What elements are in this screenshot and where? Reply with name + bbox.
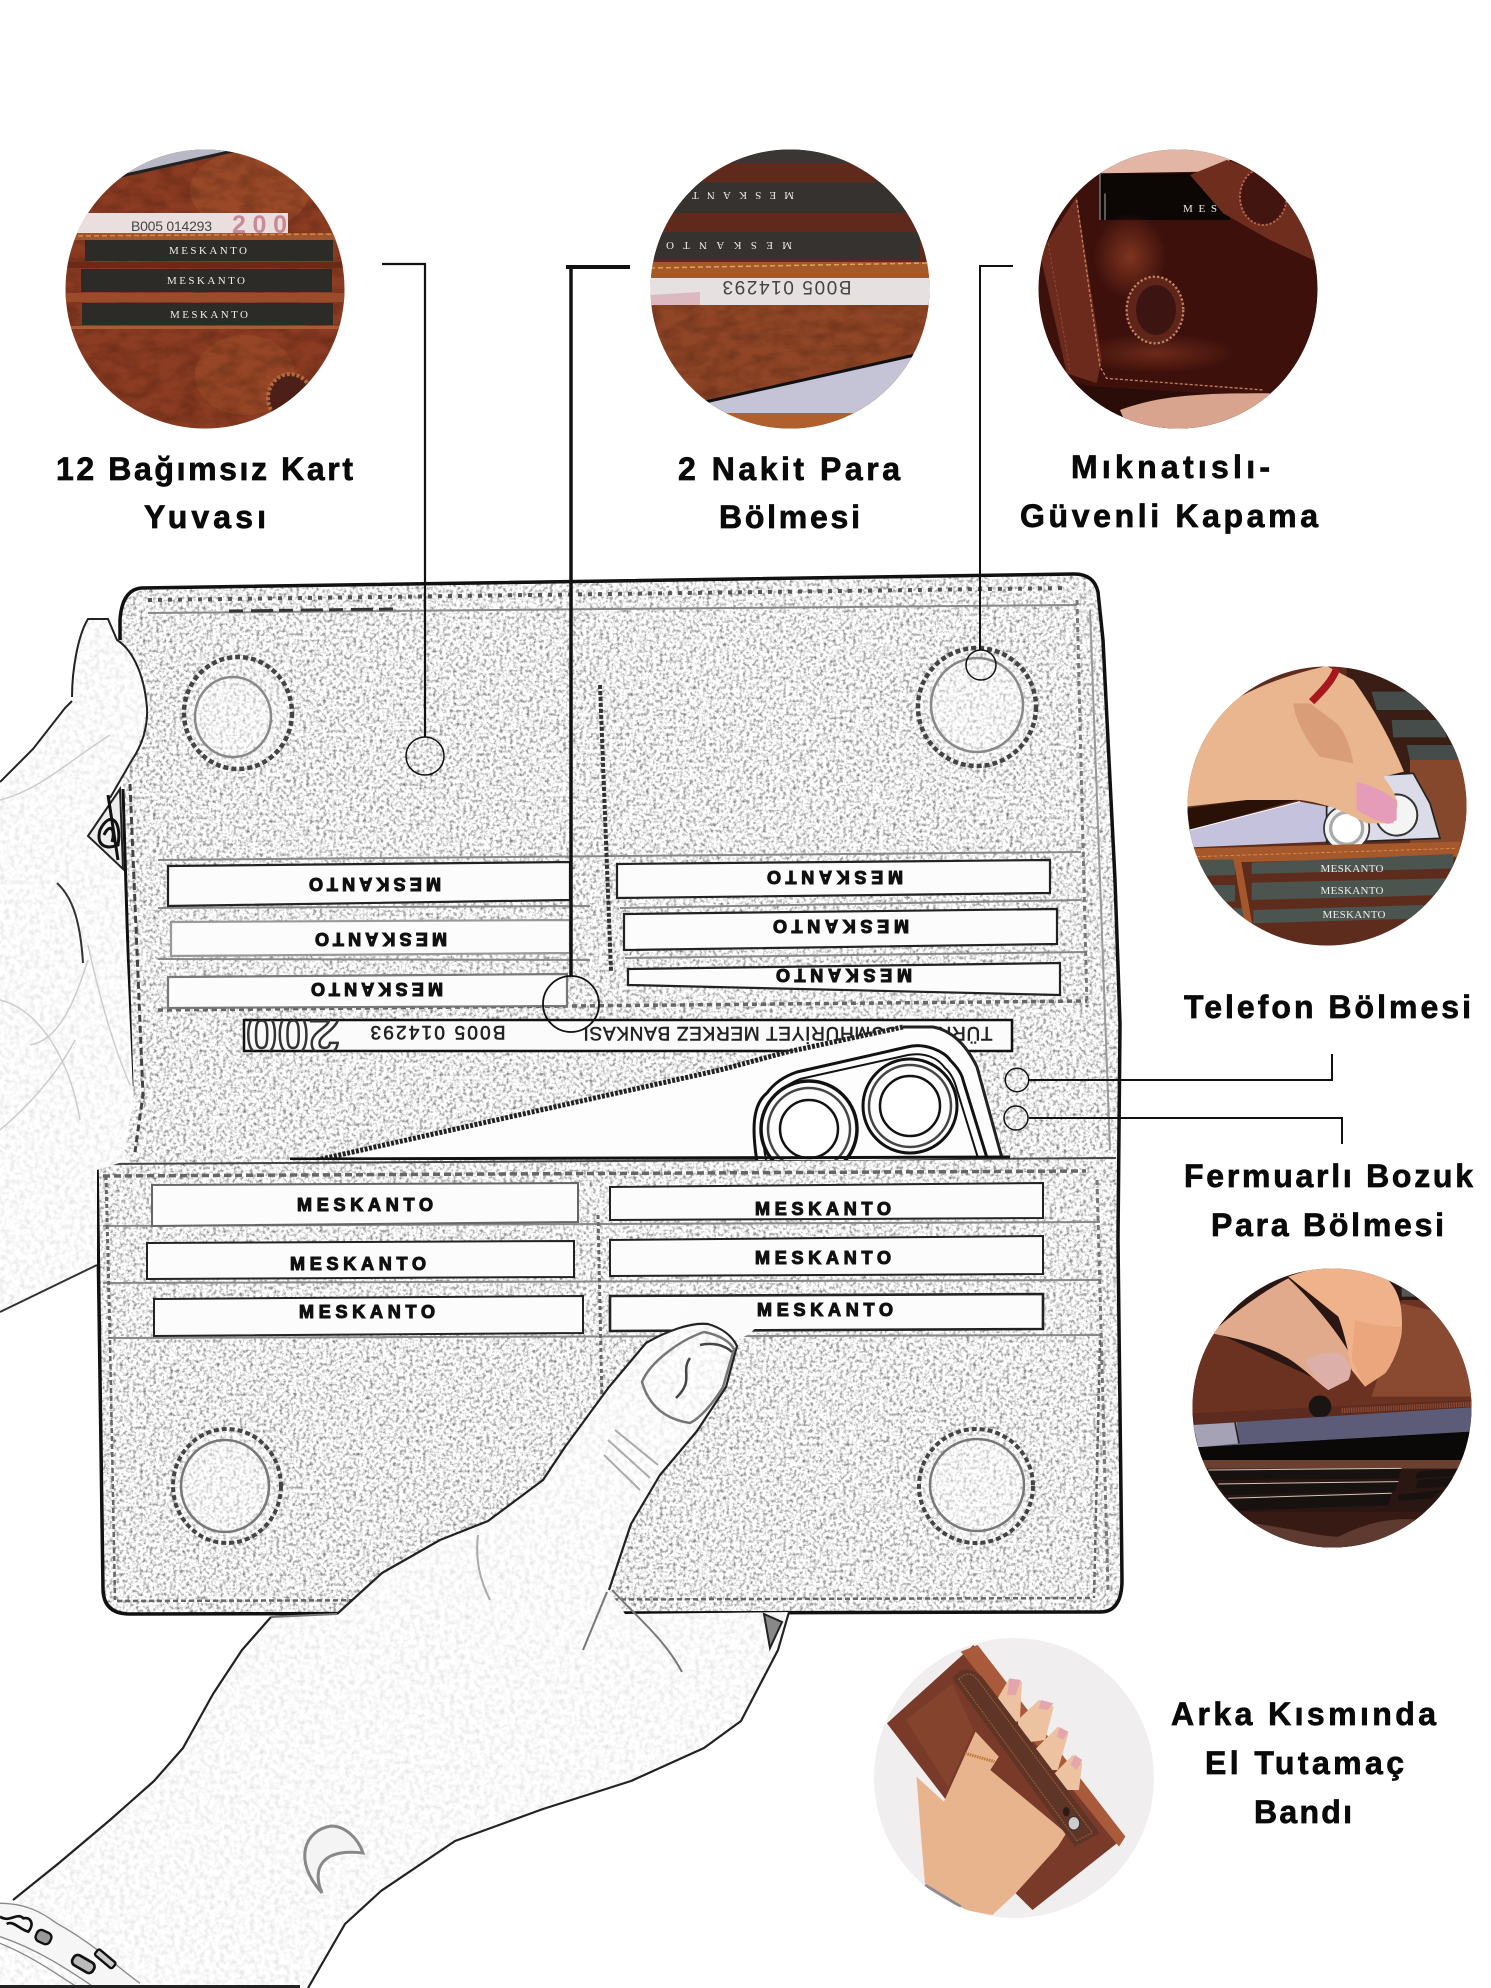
photo: kart yuvası: MESKANTO bbox=[169, 245, 247, 257]
knuckle ring bbox=[764, 1614, 782, 1648]
phone with camera lenses bbox=[290, 1027, 1010, 1177]
thumbnail bbox=[642, 1332, 734, 1423]
connector: kart yuvası bbox=[382, 264, 444, 775]
photo: kart yuvası: MESKANTO bbox=[170, 309, 248, 321]
card brand text, lower row: MESKANTO bbox=[755, 1248, 891, 1268]
bottom edge bar bbox=[0, 1985, 300, 1988]
heading: fermuarlı bozuk para bölmesi: Para Bölmesi bbox=[1211, 1207, 1444, 1243]
lower card slots bbox=[147, 1183, 1043, 1336]
photo: nakit para: MESKANTO bbox=[666, 239, 792, 251]
heading: 12 bağımsız kart yuvası: Yuvası bbox=[144, 499, 266, 535]
photo: telefon bölmesi: MESKANTO bbox=[1322, 909, 1386, 921]
photo: nakit para: MESKANTO bbox=[676, 189, 794, 201]
connector: fermuar bbox=[1004, 1106, 1342, 1144]
heading: telefon bölmesi: Telefon Bölmesi bbox=[1184, 989, 1471, 1025]
photo: nakit para: B005 014293 bbox=[722, 276, 852, 297]
heading: 2 nakit para bölmesi: 2 Nakit Para bbox=[678, 451, 900, 487]
heading: 12 bağımsız kart yuvası bbox=[56, 451, 353, 535]
banknote: TÜRKİYE CUMHURİYET MERKEZ BANKASI bbox=[584, 1022, 992, 1043]
card brand text, lower row: MESKANTO bbox=[297, 1195, 433, 1215]
card brand text, upper row: MESKANTO bbox=[767, 867, 903, 887]
tattoo: crescent moon bbox=[305, 1826, 363, 1893]
heading: arka kısmında el tutamaç bandı bbox=[1171, 1696, 1436, 1830]
banknote bbox=[242, 1018, 1014, 1052]
photo: mıknatıslı kapama: MES bbox=[1183, 203, 1217, 215]
card brand text, upper row: MESKANTO bbox=[776, 965, 912, 985]
upper left hand holding wallet bbox=[0, 619, 147, 1312]
banknote: 200 bbox=[246, 1003, 340, 1066]
wallet line drawing bbox=[97, 574, 1122, 1614]
wallet body grain bbox=[97, 574, 1122, 1614]
heading: arka kısmında el tutamaç bandı: Arka Kısmında bbox=[1171, 1696, 1436, 1732]
card brand text, lower row: MESKANTO bbox=[757, 1300, 893, 1320]
heading: arka kısmında el tutamaç bandı: Bandı bbox=[1254, 1794, 1352, 1830]
card brand text, lower row: MESKANTO bbox=[299, 1302, 435, 1322]
heading: fermuarlı bozuk para bölmesi bbox=[1184, 1158, 1473, 1243]
photo: telefon bölmesi: MESKANTO bbox=[1320, 885, 1384, 897]
photo: kart yuvası: MESKANTO bbox=[167, 275, 245, 287]
connector: telefon bbox=[1005, 1054, 1332, 1092]
card brand text, upper row bbox=[309, 867, 912, 999]
heading: mıknatıslı güvenli kapama bbox=[1020, 449, 1318, 534]
photo: mıknatıslı kapama bbox=[1038, 140, 1320, 440]
connector: mıknatıs bbox=[966, 266, 1013, 680]
photo: el tutamaç bandı bbox=[874, 1638, 1154, 1918]
magnets bbox=[173, 648, 1036, 1543]
card brand text, upper row: MESKANTO bbox=[315, 929, 447, 949]
heading: fermuarlı bozuk para bölmesi: Fermuarlı Bozuk bbox=[1184, 1158, 1473, 1194]
card brand text, lower row: MESKANTO bbox=[290, 1254, 426, 1274]
upper card slots bbox=[168, 860, 1060, 1008]
bracelet bbox=[0, 1902, 140, 1987]
connector: nakit para bbox=[543, 267, 630, 1032]
card brand text, lower row bbox=[290, 1195, 893, 1322]
heading: 2 nakit para bölmesi bbox=[678, 451, 900, 535]
photo: nakit para bbox=[650, 149, 930, 429]
photo: kart yuvası: 200 bbox=[232, 211, 287, 239]
heading: arka kısmında el tutamaç bandı: El Tutamaç bbox=[1205, 1745, 1404, 1781]
heading: 12 bağımsız kart yuvası: 12 Bağımsız Kart bbox=[56, 451, 353, 487]
photo: fermuarlı bölme bbox=[1192, 1267, 1475, 1553]
card brand text, lower row: MESKANTO bbox=[755, 1199, 891, 1219]
card brand text, upper row: MESKANTO bbox=[309, 874, 441, 894]
card brand text, upper row: MESKANTO bbox=[311, 979, 443, 999]
banknote: B005 014293 bbox=[370, 1021, 506, 1042]
photo: telefon bölmesi: MESKANTO bbox=[1320, 863, 1384, 875]
photo: kart yuvası: B005 014293 bbox=[131, 218, 212, 234]
wallet outlines bbox=[97, 574, 1122, 1614]
lower hand with thumb bbox=[0, 1298, 789, 1988]
photo: telefon bölmesi bbox=[1187, 666, 1470, 946]
heading: mıknatıslı güvenli kapama: Güvenli Kapama bbox=[1020, 498, 1318, 534]
photo: kart yuvası bbox=[60, 140, 350, 435]
card brand text, upper row: MESKANTO bbox=[773, 916, 909, 936]
heading: mıknatıslı güvenli kapama: Mıknatıslı- bbox=[1071, 449, 1270, 485]
heading: 2 nakit para bölmesi: Bölmesi bbox=[719, 499, 860, 535]
